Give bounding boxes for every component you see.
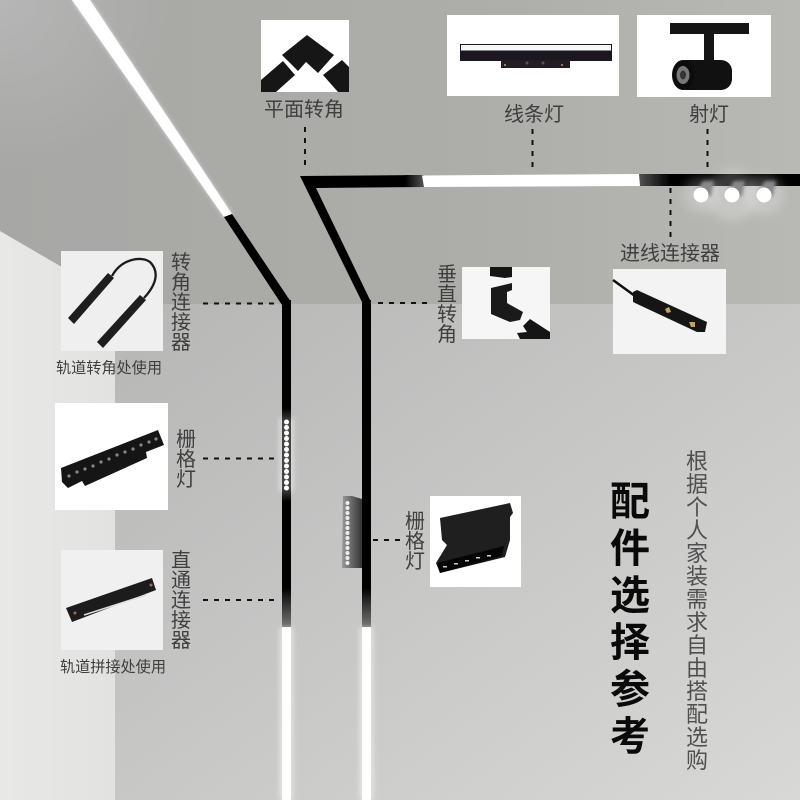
product: spotlight [637,15,771,97]
label: grille light: 栅格灯 [176,428,196,491]
grille light module on right track [342,496,362,568]
product: grille light [55,403,168,510]
product: vertical corner [462,267,550,339]
label: spotlight: 射灯 [689,103,729,126]
product: folding grille light [430,496,521,587]
horizontal linear light [422,174,640,187]
subtitle: 根据个人家装需求自由搭配选购 [686,449,708,773]
label: grille light on track: 栅格灯 [405,510,425,573]
label: straight connector: 直通连接器 [171,549,191,652]
product: straight connector [61,550,163,650]
label: feed connector: 进线连接器 [620,242,720,265]
left track with diagonal light strip [72,0,294,800]
product: linear light [447,15,619,96]
label: linear light: 线条灯 [504,103,564,126]
caption: corner connector use: 轨道转角处使用 [56,360,162,377]
title: 配件选择参考 [610,480,650,759]
label: vertical corner: 垂直转角 [437,263,457,346]
background: ceiling [0,0,800,310]
product: corner connector [61,251,163,351]
spotlights [683,169,784,221]
product: flat corner [261,20,349,92]
label: flat corner: 平面转角 [264,98,344,121]
background: left light wall [0,231,115,800]
label: corner connector: 转角连接器 [171,251,191,354]
background: main wall [115,304,800,800]
grille light lit on left track [279,408,294,502]
right track with corner and horizontal run [300,174,800,800]
caption: straight connector use: 轨道拼接处使用 [60,659,166,676]
leader lines [203,127,708,600]
product: feed connector [613,269,726,354]
